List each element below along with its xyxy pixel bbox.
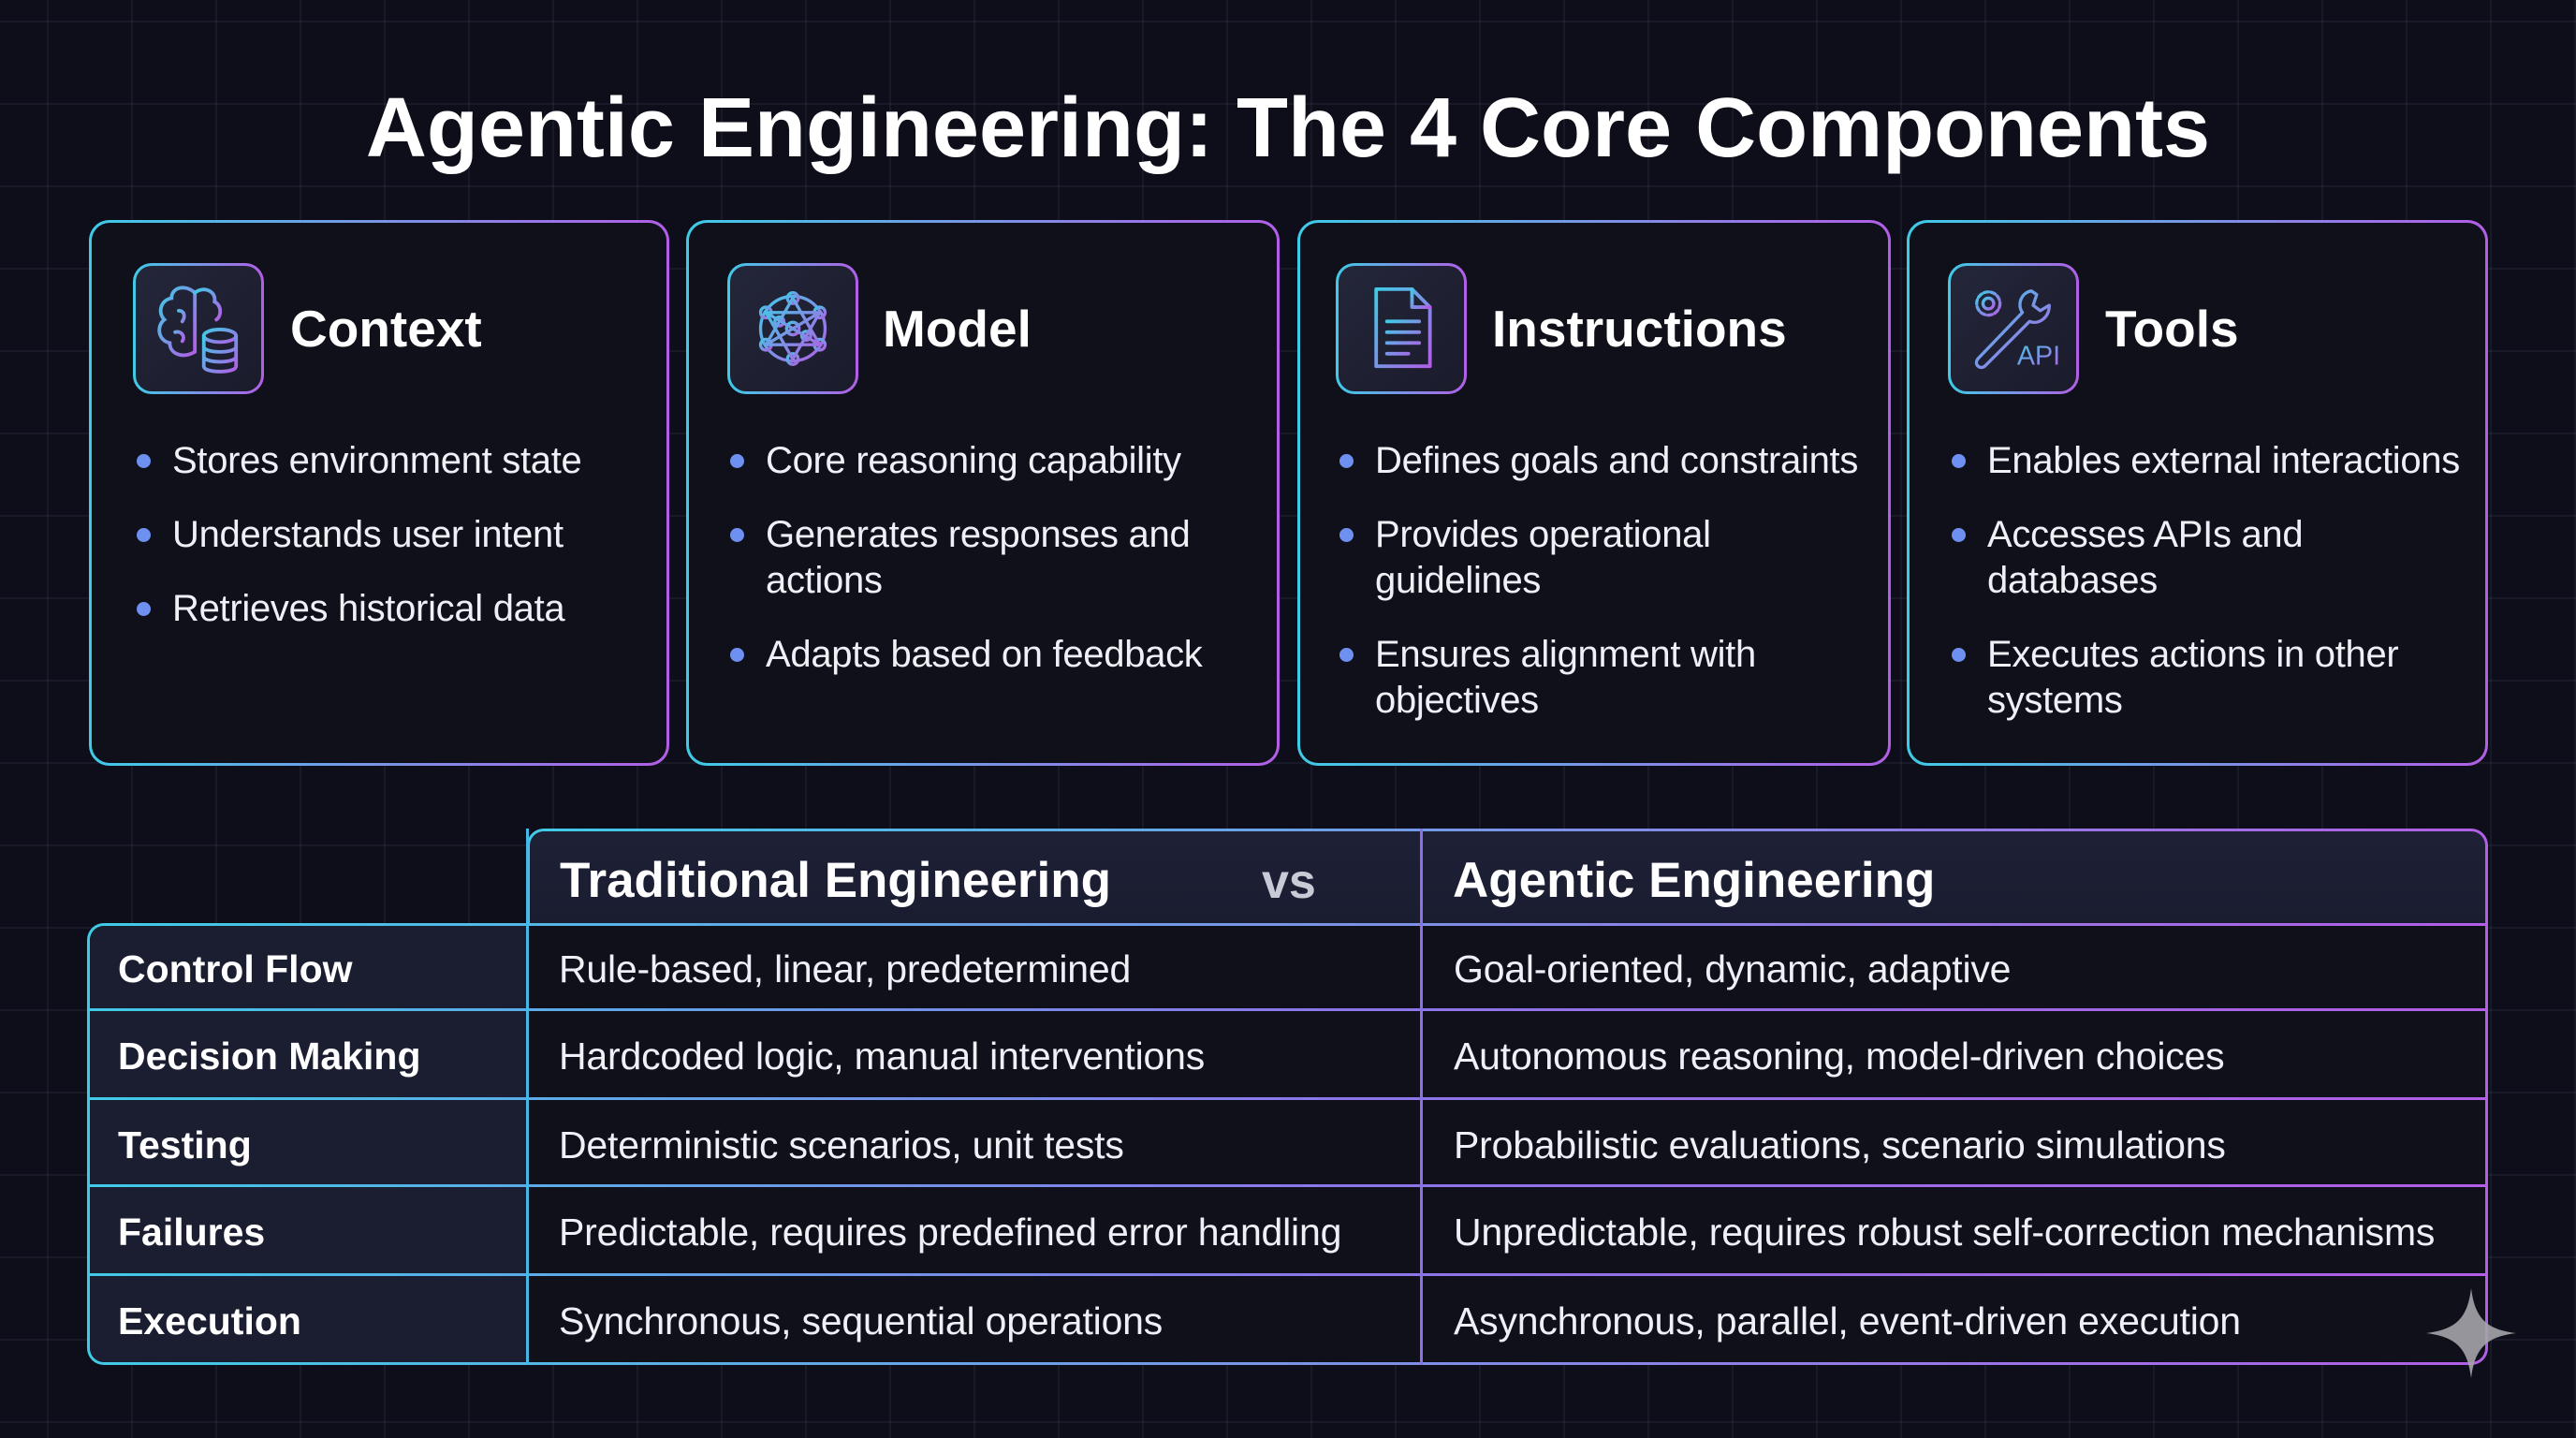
- icon: wrench gear api: API: [2017, 341, 2060, 371]
- comparison table: Synchronous, sequential operations: [559, 1299, 1163, 1343]
- panel: tools: [1907, 220, 2488, 766]
- heading: Instructions: [1492, 300, 1787, 358]
- panel: instructions: [1297, 220, 1891, 766]
- panel: model: [686, 220, 1280, 766]
- agentic cells: Goal-oriented, dynamic, adaptive: [1454, 947, 2011, 990]
- comparison table: Testing: [118, 1123, 252, 1167]
- heading: Tools: [2105, 300, 2239, 358]
- bullet list: [1339, 440, 1858, 721]
- bullet list: Core reasoning capability: [766, 440, 1181, 481]
- bullet list: [137, 440, 581, 629]
- bullet list: [730, 440, 1203, 675]
- traditional cells: Rule-based, linear, predetermined: [559, 947, 1131, 990]
- panel: context: [89, 220, 669, 766]
- table header: Traditional Engineering: [560, 853, 1111, 908]
- table body: [87, 923, 2488, 1365]
- comparison table: Asynchronous, parallel, event-driven execution: [1454, 1299, 2241, 1343]
- bullet list: Defines goals and constraints: [1375, 440, 1858, 481]
- icon: wrench gear api: [1948, 263, 2079, 394]
- comparison table: Predictable, requires predefined error handling: [559, 1211, 1341, 1254]
- icon: document: [1336, 263, 1467, 394]
- comparison table: Unpredictable, requires robust self-correction mechanisms: [1454, 1211, 2435, 1254]
- icon: brain database: [133, 263, 264, 394]
- heading: Context: [290, 300, 482, 358]
- bullet list: Generates responses and actions: [766, 514, 1190, 601]
- comparison table: Probabilistic evaluations, scenario simulations: [1454, 1123, 2226, 1167]
- bullet list: Executes actions in other systems: [1987, 634, 2398, 721]
- comparison table: Deterministic scenarios, unit tests: [559, 1123, 1124, 1167]
- icon: sparkle: [2426, 1288, 2516, 1378]
- title: Agentic Engineering: The 4 Core Components: [366, 81, 2210, 175]
- bullet list: Accesses APIs and databases: [1987, 514, 2303, 601]
- table header: vs: [1262, 855, 1316, 909]
- bullet list: Stores environment state: [172, 440, 581, 481]
- heading: Model: [883, 300, 1032, 358]
- bullet list: [1952, 440, 2460, 721]
- comparison table: Execution: [118, 1299, 301, 1343]
- bullet list: Understands user intent: [172, 514, 564, 555]
- comparison table: Failures: [118, 1211, 265, 1254]
- comparison table: Hardcoded logic, manual interventions: [559, 1034, 1205, 1078]
- bullet list: Enables external interactions: [1987, 440, 2460, 481]
- icon: neural network: [727, 263, 858, 394]
- bullet list: Retrieves historical data: [172, 588, 564, 629]
- bullet list: Provides operational guidelines: [1375, 514, 1711, 601]
- bullet list: Adapts based on feedback: [766, 634, 1202, 675]
- table header: [527, 829, 2488, 926]
- bullet list: Ensures alignment with objectives: [1375, 634, 1756, 721]
- row labels: Control Flow: [118, 947, 353, 990]
- comparison table: Autonomous reasoning, model-driven choices: [1454, 1034, 2224, 1078]
- table header: Agentic Engineering: [1453, 853, 1935, 908]
- comparison table: Decision Making: [118, 1034, 421, 1078]
